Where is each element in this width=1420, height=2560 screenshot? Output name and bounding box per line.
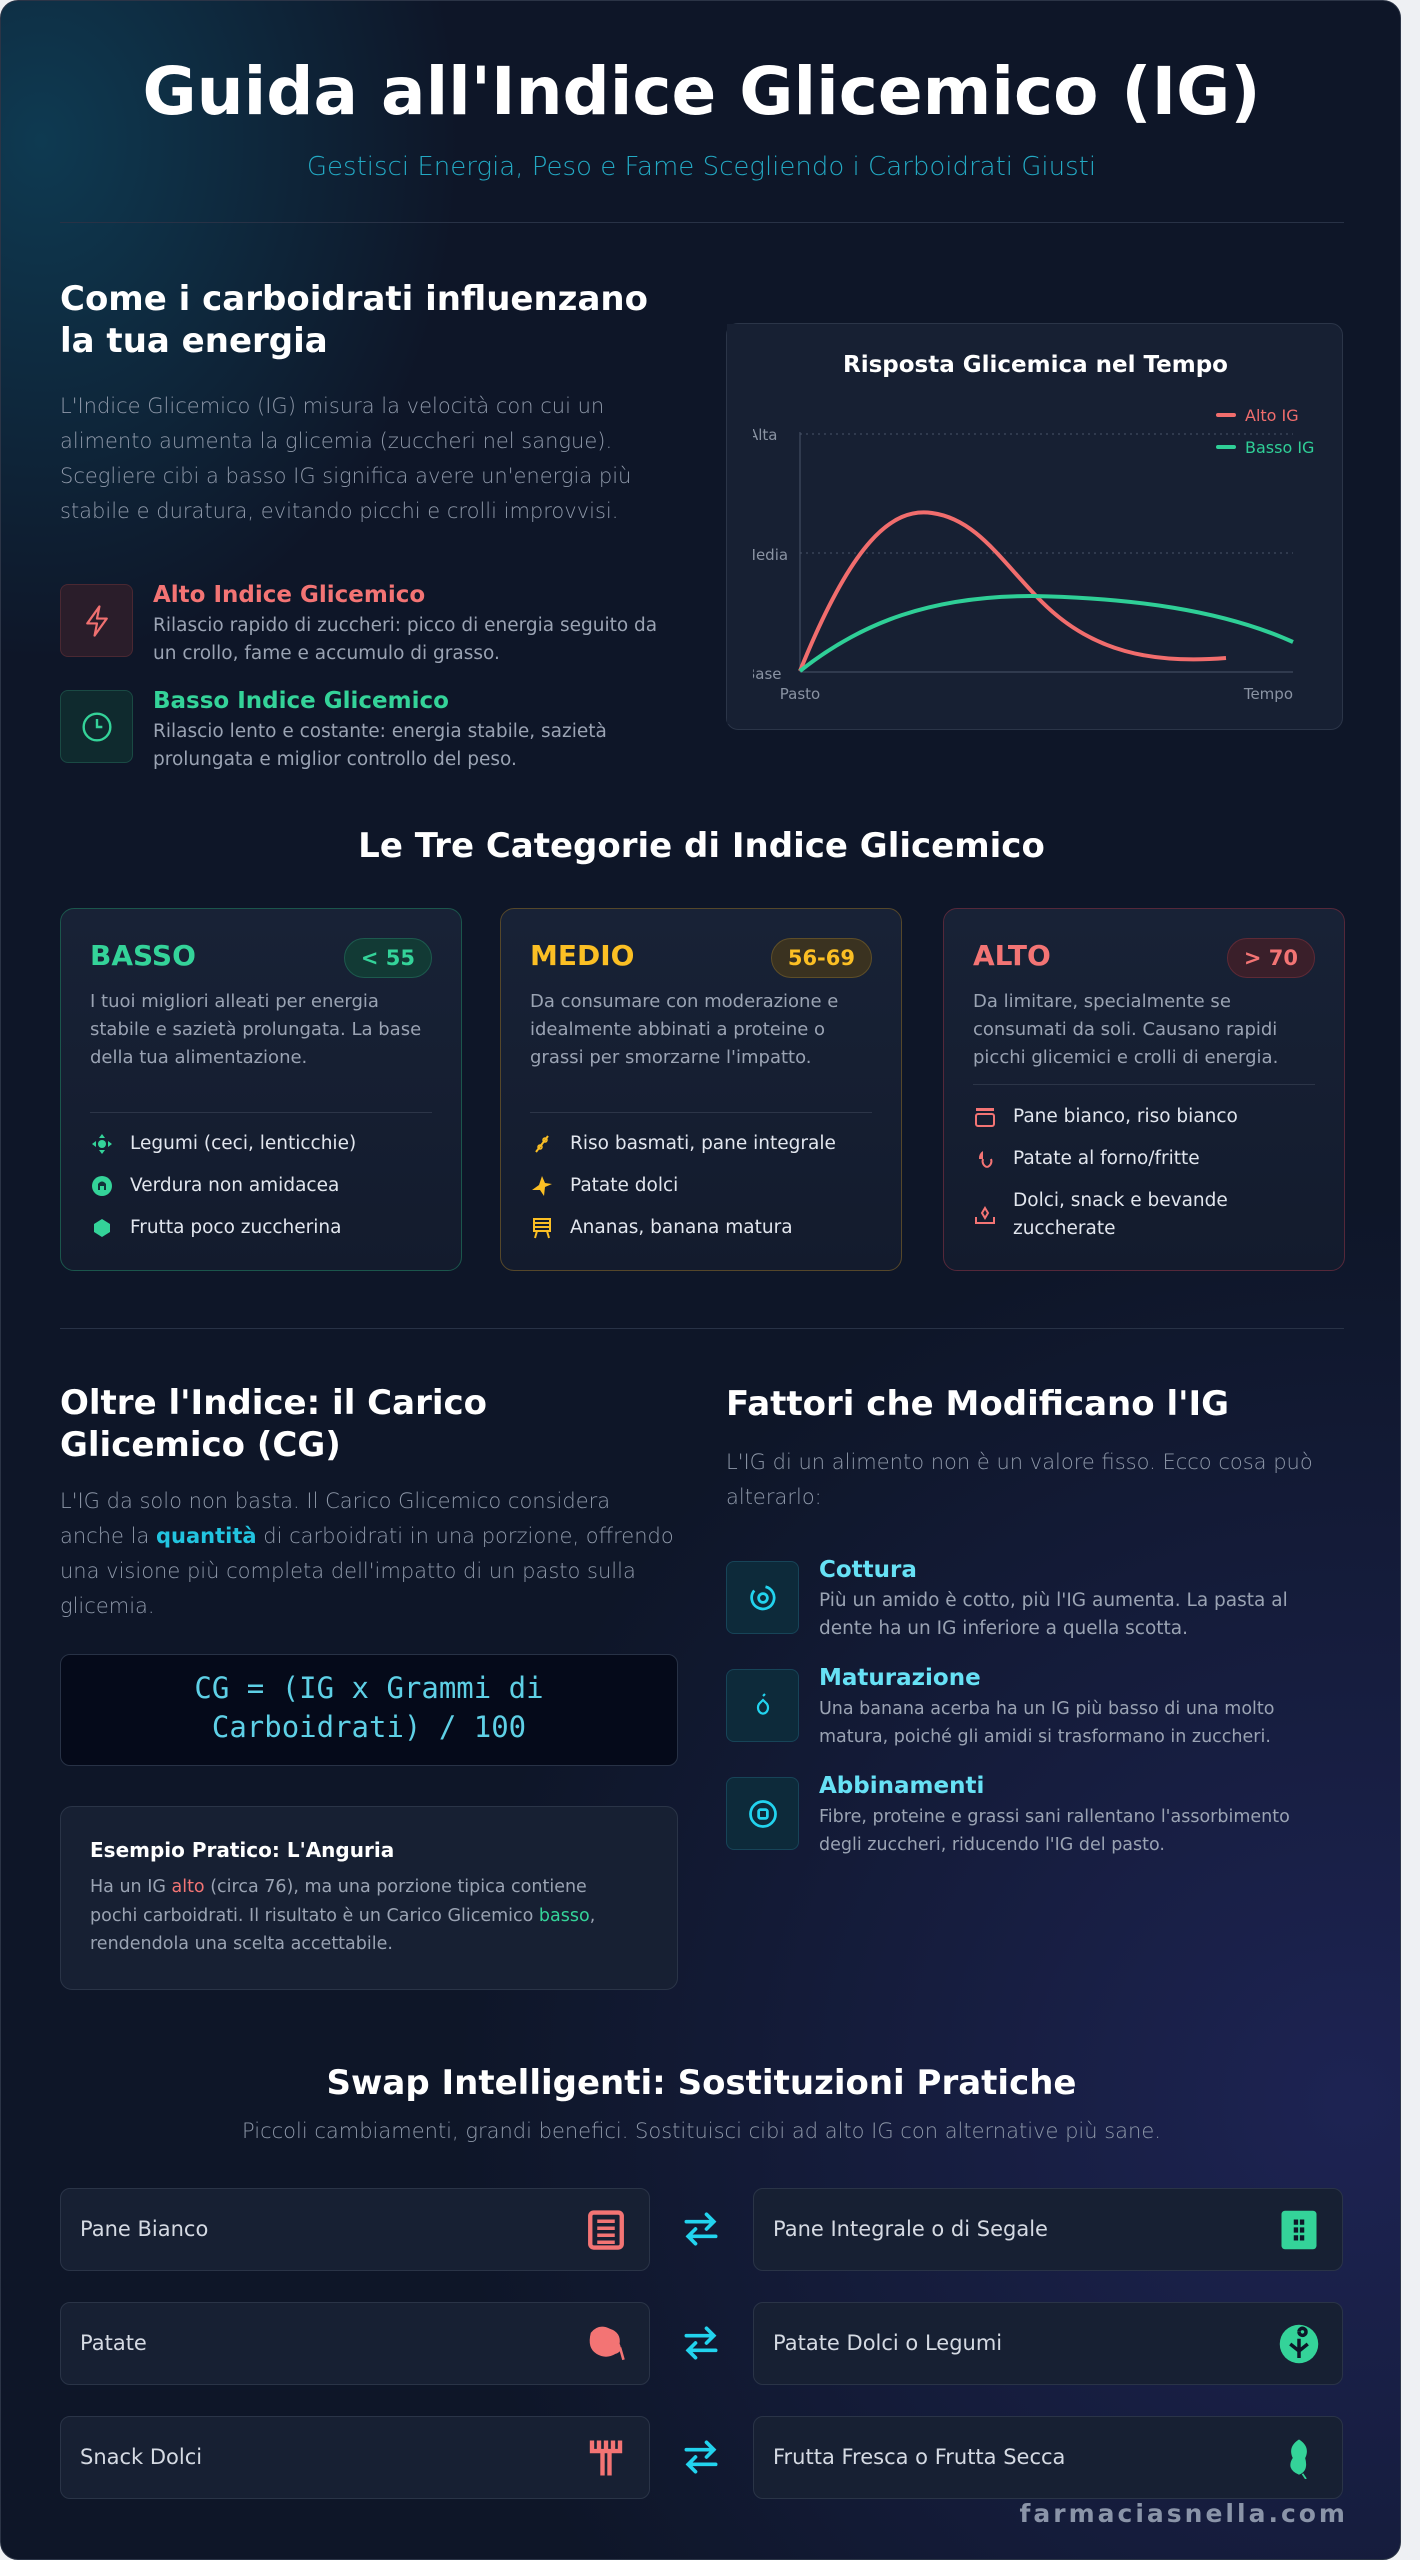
icon: lightning — [60, 584, 133, 657]
card: alto: Da limitare, specialmente se consumati da soli. Causano rapidi picchi glicemici e crolli di energia. — [973, 991, 1278, 1068]
factor: abbinamenti: Abbinamenti — [819, 1773, 984, 1799]
arrow: swap — [684, 2212, 718, 2246]
list: basso: Legumi (ceci, lenticchie) — [130, 1133, 356, 1154]
line chart: Tempo — [1243, 685, 1293, 703]
card: basso: BASSO — [90, 939, 196, 972]
icon: cooking — [726, 1561, 799, 1634]
text: Alto Indice Glicemico — [153, 582, 425, 608]
swap: patate: Patate — [80, 2331, 147, 2355]
section heading: fattori: Fattori che Modificano l'IG — [726, 1384, 1229, 1424]
text: Rilascio lento e costante: energia stabile, sazietà prolungata e miglior controllo del peso. — [153, 721, 607, 770]
line chart: Base — [745, 665, 782, 683]
factor: abbinamenti — [726, 1773, 1290, 1855]
chart title: Risposta Glicemica nel Tempo — [843, 352, 1228, 378]
swap: pane integrale: Pane Integrale o di Segale — [773, 2217, 1048, 2241]
card: alto: Patate al forno/fritte — [1013, 1148, 1200, 1169]
factor: cottura: Più un amido è cotto, più l'IG aumenta. La pasta al dente ha un IG inferiore a quella scotta. — [819, 1590, 1288, 1639]
icon: fruit — [726, 1669, 799, 1742]
factor: maturazione: Maturazione — [819, 1665, 981, 1691]
factor: maturazione: Una banana acerba ha un IG più basso di una molto matura, poiché gli amidi si trasformano in zuccheri. — [819, 1699, 1274, 1747]
card: medio: Ananas, banana matura — [570, 1217, 793, 1238]
text: Rilascio rapido di zuccheri: picco di energia seguito da un crollo, fame e accumulo di grasso. — [153, 615, 657, 664]
title: Guida all'Indice Glicemico (IG) — [142, 53, 1260, 130]
swap: patate dolci — [753, 2302, 1343, 2385]
footer: website: farmaciasnella.com — [1020, 2499, 1348, 2528]
swap: patate — [60, 2302, 650, 2385]
card: basso: < 55 — [361, 946, 415, 970]
line chart — [727, 324, 1314, 724]
card: medio — [500, 908, 902, 1271]
swap: snack dolci: Snack Dolci — [80, 2445, 202, 2469]
line chart: Alto IG — [1245, 406, 1299, 425]
card: alto: Dolci, snack e bevande zuccherate — [1013, 1190, 1228, 1239]
text — [153, 688, 607, 770]
section heading: energia: la tua energia — [60, 321, 328, 361]
section heading: energia: Come i carboidrati influenzano — [60, 279, 648, 319]
icon: clock — [60, 690, 133, 763]
example box: Ha un IG alto (circa 76), ma una porzione tipica contiene pochi carboidrati. Il risultato è un Carico Glicemico basso, rendendola una scelta accettabile. — [90, 1877, 595, 1954]
section heading: energia — [60, 279, 648, 361]
factor: abbinamenti: Fibre, proteine e grassi sani rallentano l'assorbimento degli zuccheri, riducendo l'IG del pasto. — [819, 1807, 1290, 1855]
card: basso: Frutta poco zuccherina — [130, 1217, 341, 1238]
formula box: CG = (IG x Grammi di — [194, 1671, 544, 1705]
list: alto: Pane bianco, riso bianco — [1013, 1106, 1238, 1127]
item: basso IG — [60, 688, 607, 770]
swap subtitle: Piccoli cambiamenti, grandi benefici. Sostituisci cibi ad alto IG con alternative più sane. — [242, 2119, 1161, 2143]
factor: maturazione — [726, 1665, 1274, 1747]
line chart: Basso IG — [1245, 438, 1314, 457]
card: basso — [60, 908, 462, 1271]
card: alto — [943, 908, 1345, 1271]
card: medio: MEDIO — [530, 939, 634, 972]
swap: pane integrale — [753, 2188, 1343, 2271]
subtitle: Gestisci Energia, Peso e Fame Scegliendo i Carboidrati Giusti — [307, 152, 1096, 182]
item: alto IG — [60, 582, 657, 664]
factor: cottura: Cottura — [819, 1557, 917, 1583]
line chart: Media — [743, 546, 788, 564]
swap row 2 — [60, 2302, 1343, 2385]
icon: target — [726, 1777, 799, 1850]
section heading: categorie: Le Tre Categorie di Indice Glicemico — [358, 826, 1045, 866]
list: medio: Riso basmati, pane integrale — [570, 1133, 836, 1154]
formula box: Carboidrati) / 100 — [212, 1710, 526, 1744]
CG paragraph: L'IG da solo non basta. Il Carico Glicemico considera anche la quantità di carboidrati in una porzione, offrendo una visione più completa dell'impatto di un pasto sulla glicemia. — [60, 1489, 674, 1618]
swap: pane bianco: Pane Bianco — [80, 2217, 208, 2241]
line chart: Pasto — [780, 685, 820, 703]
example box — [60, 1806, 678, 1990]
factor: cottura — [726, 1557, 1288, 1639]
section heading: swap: Swap Intelligenti: Sostituzioni Pratiche — [326, 2063, 1076, 2103]
arrow: swap — [684, 2326, 718, 2360]
text: Basso Indice Glicemico — [153, 688, 449, 714]
swap: pane bianco — [60, 2188, 650, 2271]
swap: frutta: Frutta Fresca o Frutta Secca — [773, 2445, 1065, 2469]
card: basso: Verdura non amidacea — [130, 1175, 339, 1196]
section heading: carico glicemico: Oltre l'Indice: il Carico Glicemico (CG) — [60, 1383, 487, 1465]
card: medio: Patate dolci — [570, 1175, 678, 1196]
swap row 1 — [60, 2188, 1343, 2271]
swap row 3 — [60, 2416, 1343, 2499]
card: alto: > 70 — [1244, 946, 1298, 970]
swap: frutta — [753, 2416, 1343, 2499]
card: medio: 56-69 — [788, 946, 855, 970]
intro paragraph: L'Indice Glicemico (IG) misura la velocità con cui un alimento aumenta la glicemia (zuccheri nel sangue). Scegliere cibi a basso IG significa avere un'energia più stabile e duratura, evitando picchi e crolli improvvisi. — [60, 394, 631, 523]
formula box — [60, 1654, 678, 1766]
chart panel — [726, 323, 1343, 730]
example box: Esempio Pratico: L'Anguria — [90, 1838, 394, 1862]
line chart: Alta — [748, 426, 778, 444]
card: medio: Da consumare con moderazione e idealmente abbinati a proteine o grassi per smorzarne l'impatto. — [530, 991, 838, 1068]
arrow: swap — [684, 2440, 718, 2474]
card: basso: I tuoi migliori alleati per energia stabile e sazietà prolungata. La base della tua alimentazione. — [90, 991, 421, 1068]
swap: patate dolci: Patate Dolci o Legumi — [773, 2331, 1002, 2355]
text — [153, 582, 657, 664]
swap: snack dolci — [60, 2416, 650, 2499]
fattori paragraph: L'IG di un alimento non è un valore fisso. Ecco cosa può alterarlo: — [726, 1450, 1313, 1509]
card: alto: ALTO — [973, 939, 1051, 972]
